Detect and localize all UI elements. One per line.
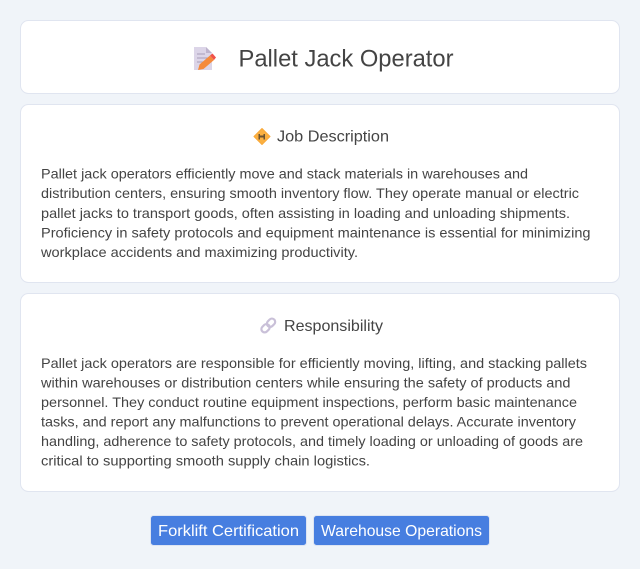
text block: responsibility: personnel. They conduct routine equipment inspections, perform basic maintenance [41,394,577,410]
text block: responsibility [40,355,587,468]
tag: forklift certification [150,516,306,546]
text block: job description [40,166,591,260]
text block: responsibility: tasks, and report any malfunctions to prevent operational delays. Accurate inventory [41,414,576,430]
text block: job description: Pallet jack operators efficiently move and stack materials in warehouses and [41,166,528,182]
text block: job description: workplace accidents and maximizing productivity. [40,244,358,260]
tag: warehouse operations: Warehouse Operations [321,523,482,540]
text block: responsibility: within warehouses or distribution centers while ensuring the safety of products and [40,374,571,390]
title: Pallet Jack Operator [238,46,454,72]
text block: job description: pallet jacks to transport goods, often assisting in loading and unloading shipments. [41,205,570,221]
text block: job description: distribution centers, ensuring smooth inventory flow. They operate manual or electric [41,185,579,201]
tag: forklift certification: Forklift Certification [158,523,299,540]
icon: document with pencil [194,47,216,70]
text block: job description: Proficiency in safety protocols and equipment maintenance is essential for minimizing [41,224,590,240]
icon: orange diamond sign [254,128,270,144]
panel: job description [20,104,620,282]
tag: warehouse operations [314,516,490,546]
heading: responsibility: Responsibility [284,318,383,335]
panel: title card [20,20,620,94]
icon: chain link [260,317,277,334]
panel: responsibility [20,294,620,492]
text block: responsibility: critical to supporting smooth supply chain logistics. [41,452,370,468]
text block: responsibility: handling, adherence to safety protocols, and timely loading or unloading of goods are [41,433,583,449]
text block: responsibility: Pallet jack operators are responsible for efficiently moving, lifting, and stacking pallets [41,355,587,371]
heading: job description: Job Description [277,128,389,146]
